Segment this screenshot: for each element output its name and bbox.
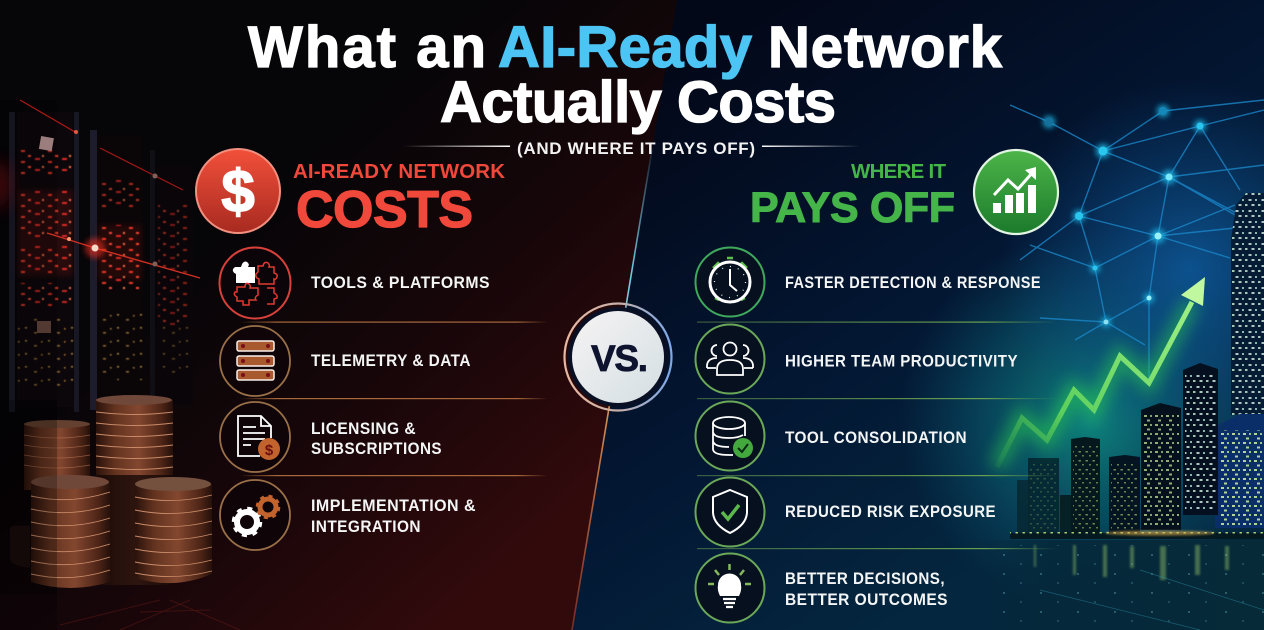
- item: reduced risk: [696, 478, 996, 546]
- decoration: shoreline lights: [1010, 530, 1264, 539]
- decoration: floor glow left: [60, 600, 240, 630]
- icon: growth chart badge: [974, 150, 1058, 234]
- panel: costs column: [196, 149, 548, 550]
- title: Network: [768, 15, 1003, 80]
- item: team productivity: [696, 324, 1018, 394]
- item: tools and platforms: TOOLS & PLATFORMS: [311, 273, 490, 292]
- coin stack: back left: [24, 420, 90, 490]
- icon: dollar badge: [196, 149, 280, 233]
- title: Actually Costs: [440, 70, 836, 135]
- illustration: coin stacks: [0, 395, 212, 595]
- item: tools and platforms: [220, 248, 490, 318]
- panel: left red background: [0, 0, 677, 630]
- separator: [697, 475, 1057, 476]
- building: low block: [1109, 455, 1140, 533]
- item: licensing and subscriptions: $: [265, 442, 274, 459]
- item: reduced risk: REDUCED RISK EXPOSURE: [785, 502, 996, 521]
- separator: [697, 548, 1057, 549]
- title: [248, 15, 1003, 135]
- building: block 2: [1017, 458, 1071, 534]
- illustration: blue network mesh: [1010, 100, 1264, 380]
- separator: [240, 475, 548, 476]
- item: licensing and subscriptions: [220, 402, 442, 472]
- item: better decisions: BETTER DECISIONS,: [785, 569, 945, 588]
- title: AI-Ready: [498, 15, 752, 80]
- heading: where it pays off: [750, 160, 955, 232]
- illustration: red light streaks: [0, 100, 200, 278]
- item: faster detection: FASTER DETECTION & RESPONSE: [785, 273, 1041, 292]
- heading: where it pays off: WHERE IT: [851, 160, 946, 183]
- illustration: server racks: [0, 100, 193, 630]
- item: telemetry and data: [220, 326, 471, 396]
- item: telemetry and data: TELEMETRY & DATA: [311, 351, 471, 370]
- item: implementation and integration: INTEGRATION: [311, 517, 421, 536]
- illustration: city skyline: [1010, 193, 1264, 539]
- building: right block: [1215, 414, 1264, 528]
- building: mid tower: [1183, 363, 1218, 515]
- divider: diagonal split line: [572, 150, 652, 630]
- heading: where it pays off: PAYS OFF: [750, 184, 955, 232]
- heading: AI-ready network costs: [293, 160, 505, 239]
- vs badge: [564, 304, 672, 410]
- item: implementation and integration: [220, 480, 476, 550]
- item: tool consolidation: TOOL CONSOLIDATION: [785, 428, 967, 447]
- item: better decisions: [696, 554, 948, 622]
- building: center tower: [1141, 403, 1181, 530]
- item: better decisions: BETTER OUTCOMES: [785, 590, 948, 609]
- item: licensing and subscriptions: SUBSCRIPTIONS: [311, 439, 442, 458]
- building: block 3: [1071, 437, 1100, 533]
- building: tall tower: [1231, 193, 1264, 415]
- item: team productivity: HIGHER TEAM PRODUCTIVITY: [785, 352, 1018, 370]
- heading: AI-ready network costs: AI-READY NETWORK: [293, 160, 505, 183]
- separator: [697, 322, 1057, 323]
- chart: glowing growth arrow: [997, 277, 1205, 467]
- item: faster detection: [696, 248, 1041, 316]
- separator: [240, 322, 548, 323]
- panel: pays off column: [696, 150, 1058, 622]
- separator: [240, 398, 548, 399]
- title: What an: [248, 15, 486, 80]
- panel: right navy background: [572, 0, 1264, 630]
- vs badge: VS.: [591, 338, 648, 379]
- heading: AI-ready network costs: COSTS: [296, 181, 473, 239]
- item: implementation and integration: IMPLEMENTATION &: [311, 496, 476, 515]
- coin stack: front right: [135, 477, 212, 583]
- coin stack: far left shadow: [10, 525, 30, 568]
- subtitle: (AND WHERE IT PAYS OFF): [517, 139, 755, 158]
- illustration: water reflection: [960, 540, 1264, 630]
- icon: dollar badge: $: [221, 158, 255, 225]
- separator: [697, 398, 1057, 399]
- coin stack: front left: [31, 475, 110, 588]
- coin stack: back tall: [96, 395, 173, 585]
- item: tool consolidation: [696, 402, 967, 470]
- item: licensing and subscriptions: LICENSING &: [311, 419, 416, 438]
